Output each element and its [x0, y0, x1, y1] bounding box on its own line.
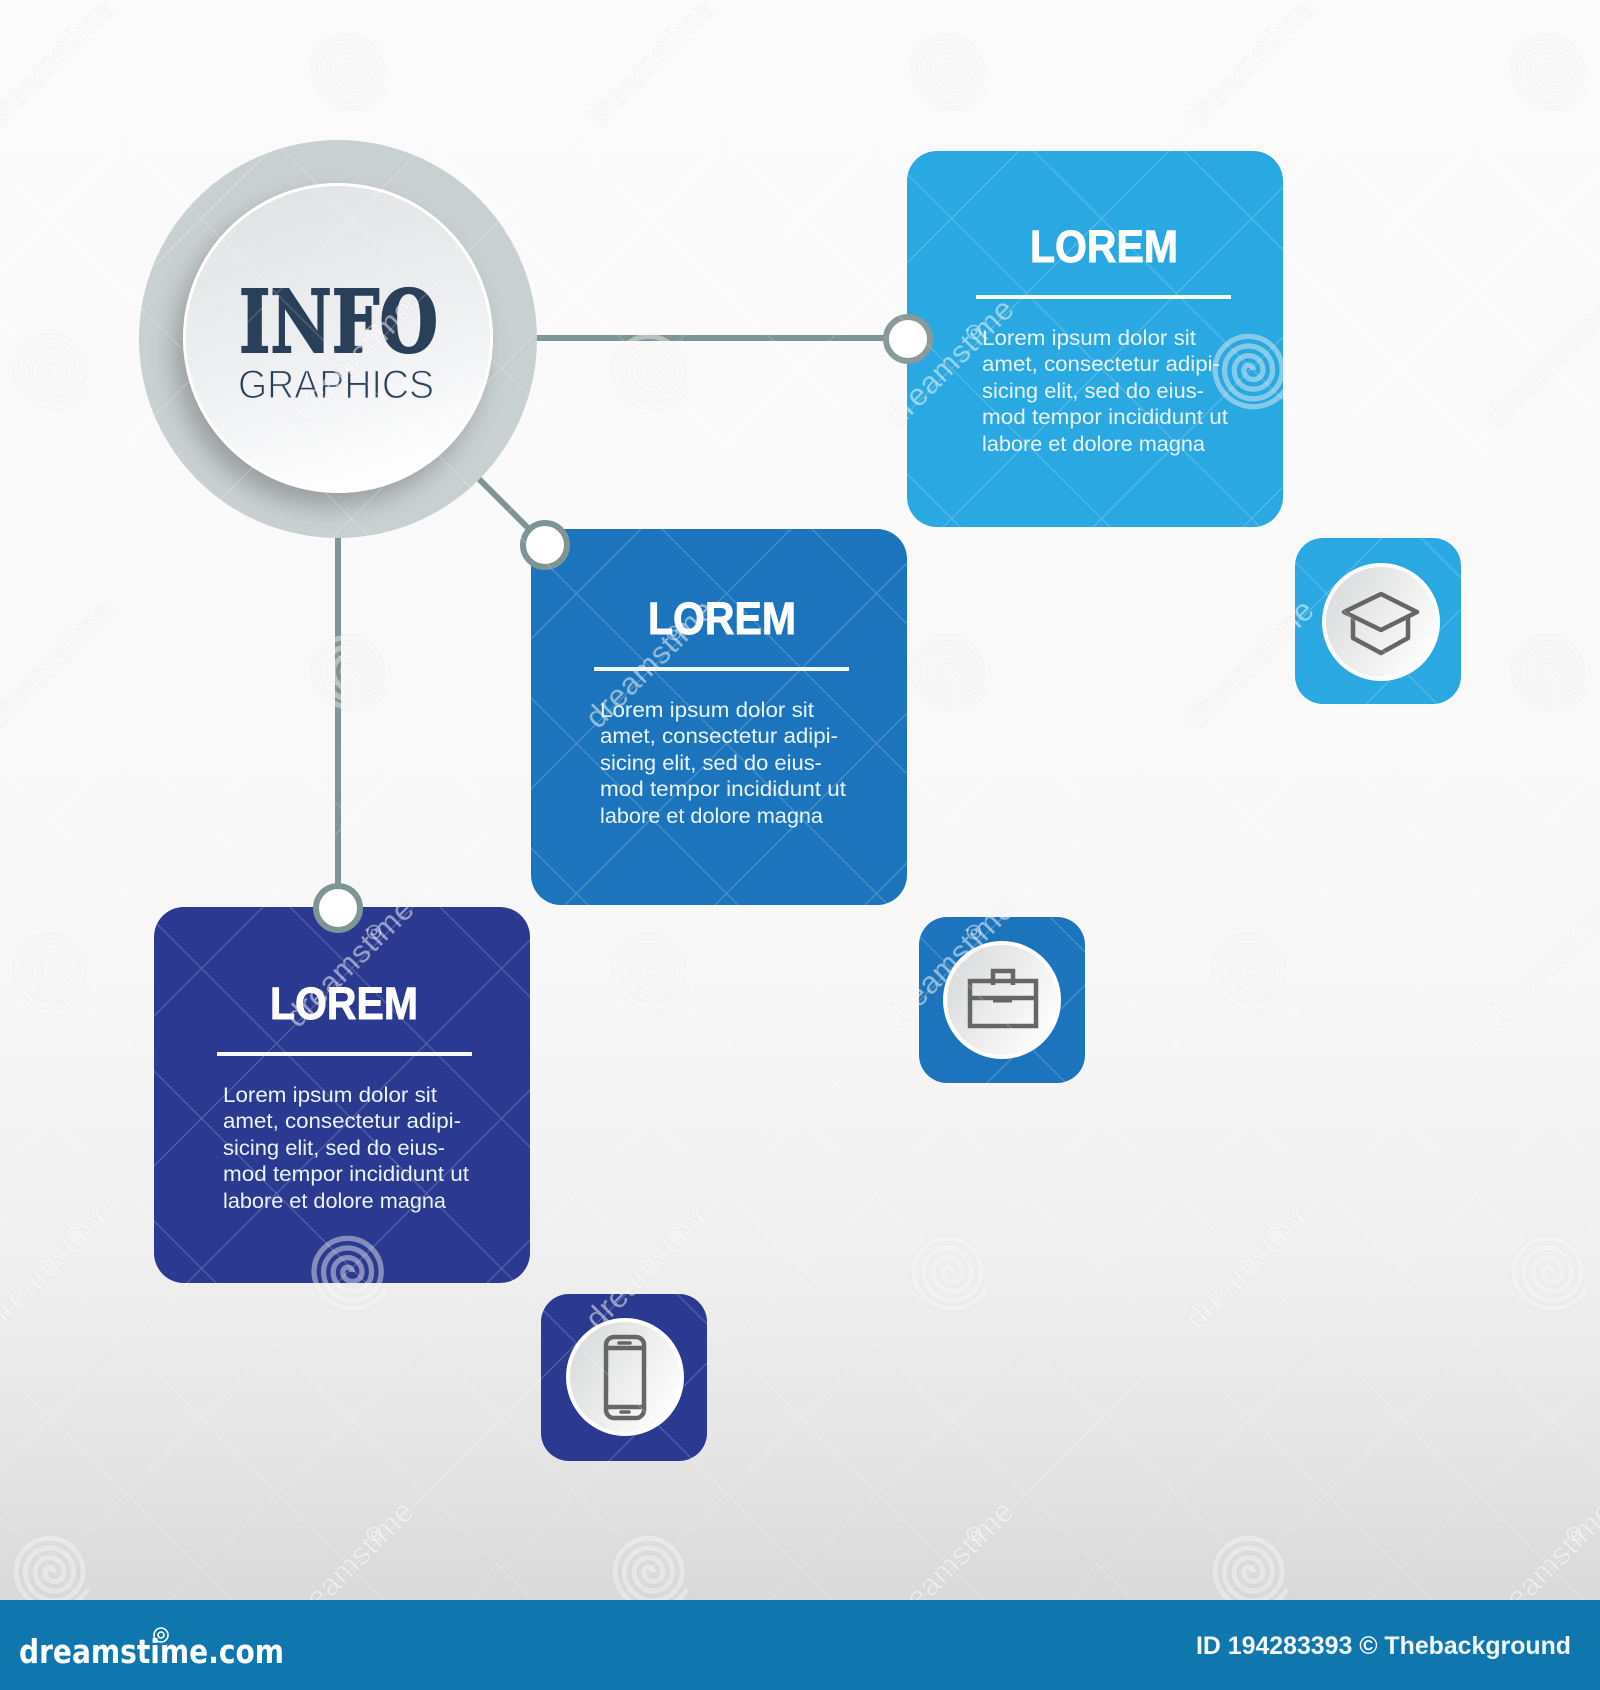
- card text: labore et dolore magna: [982, 433, 1205, 456]
- card text: Lorem ipsum dolor sit: [982, 327, 1196, 350]
- card divider: [594, 667, 849, 671]
- card text: amet, consectetur adipi-: [600, 725, 838, 748]
- footer bar: [0, 1600, 1600, 1690]
- card heading: LOREM: [648, 593, 796, 644]
- outer grey ring: [139, 140, 537, 538]
- card divider: [976, 295, 1231, 299]
- panel: mid blue card: [531, 529, 907, 905]
- card text: Lorem ipsum dolor sit: [223, 1084, 437, 1107]
- card text: [982, 327, 1228, 456]
- card text: amet, consectetur adipi-: [223, 1110, 461, 1133]
- icon tile: briefcase: [919, 917, 1085, 1083]
- watermark layer: dreamstime: [278, 291, 421, 434]
- card text: mod tempor incididunt ut: [600, 778, 846, 801]
- card text: labore et dolore magna: [600, 805, 823, 828]
- watermark layer: dreamstime: [878, 891, 1021, 1034]
- inner disc: [183, 183, 493, 493]
- card divider: [217, 1052, 472, 1056]
- card text: sicing elit, sed do eius-: [223, 1137, 445, 1160]
- icon tile: smartphone: [541, 1294, 707, 1461]
- title: INFO: INFO: [239, 272, 438, 373]
- card text: [600, 699, 846, 828]
- icon: smartphone: [606, 1337, 644, 1418]
- central hub: info graphics circle: [139, 140, 537, 538]
- connector node: top card: [886, 317, 930, 361]
- logo spiral mark: [154, 1628, 168, 1642]
- connector node: middle card: [523, 523, 567, 567]
- card text: sicing elit, sed do eius-: [600, 752, 822, 775]
- connector node: bottom card: [316, 886, 360, 930]
- connector lines: [338, 338, 890, 890]
- watermark layer: dreamstime: [878, 1493, 1021, 1636]
- footer logo: dreamstime.com: [19, 1632, 284, 1671]
- panel: light blue card: [907, 151, 1283, 527]
- icon: briefcase: [970, 971, 1036, 1026]
- subtitle: GRAPHICS: GRAPHICS: [238, 363, 434, 407]
- card heading: LOREM: [1030, 221, 1178, 272]
- card text: amet, consectetur adipi-: [982, 353, 1220, 376]
- card text: sicing elit, sed do eius-: [982, 380, 1204, 403]
- card text: [223, 1084, 469, 1213]
- watermark layer: dreamstime: [1178, 592, 1321, 735]
- card text: Lorem ipsum dolor sit: [600, 699, 814, 722]
- card text: mod tempor incididunt ut: [223, 1163, 469, 1186]
- watermark layer: dreamstime: [278, 1493, 421, 1636]
- card heading: LOREM: [270, 978, 418, 1029]
- footer credit: ID 194283393 © Thebackground: [1196, 1632, 1571, 1660]
- watermark layer: dreamstime: [878, 291, 1021, 434]
- icon tile: graduation cap: [1295, 538, 1461, 704]
- card text: mod tempor incididunt ut: [982, 406, 1228, 429]
- icon: graduation cap: [1344, 594, 1417, 653]
- panel: dark blue card: [154, 907, 530, 1283]
- watermark layer: dreamstime: [1178, 1193, 1321, 1336]
- watermark layer: dreamstime: [578, 1193, 721, 1336]
- watermark layer: dreamstime: [578, 592, 721, 735]
- card text: labore et dolore magna: [223, 1190, 446, 1213]
- watermark layer: dreamstime: [278, 891, 421, 1034]
